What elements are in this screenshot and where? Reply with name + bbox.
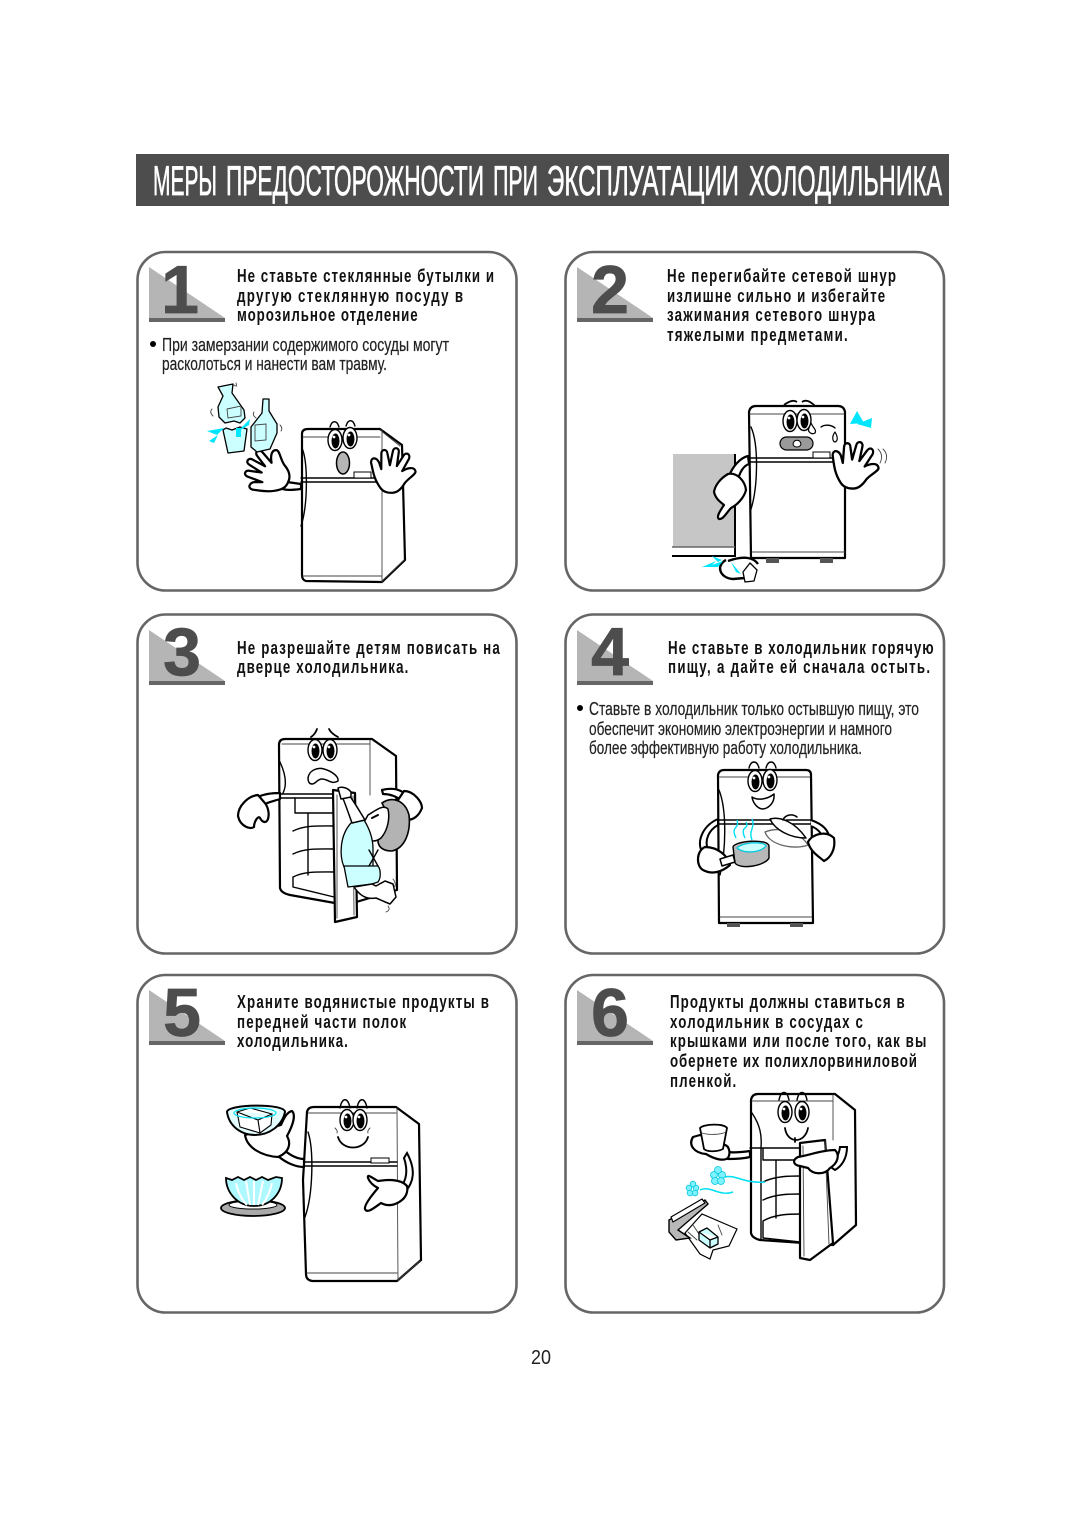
heading 2: тяжелыми предметами.: [667, 325, 848, 346]
heading 6: [670, 992, 926, 1092]
heading 4: пищу, а дайте ей сначала остыть.: [668, 657, 930, 678]
title banner: [136, 154, 949, 206]
heading 1: [237, 266, 494, 326]
note 1: При замерзании содержимого сосуды могут: [162, 334, 449, 355]
number badge 3: 3: [163, 614, 201, 690]
heading 3: Не разрешайте детям повисать на: [237, 638, 501, 659]
heading 1: морозильное отделение: [237, 305, 418, 326]
number badge 4: 4: [591, 614, 629, 690]
title banner: ПРЕДОСТОРОЖНОСТИ: [226, 157, 484, 204]
title banner: МЕРЫ: [153, 157, 217, 204]
heading 6: холодильник в сосудах с: [670, 1012, 863, 1033]
title banner: ЭКСПЛУАТАЦИИ: [547, 157, 739, 204]
note 1: расколоться и нанести вам травму.: [162, 353, 387, 374]
heading 6: крышками или после того, как вы: [670, 1031, 926, 1052]
number badge 1: 1: [161, 252, 199, 328]
panel 6: covered food: [566, 975, 944, 1312]
title banner: ПРИ: [493, 157, 538, 204]
heading 4: Не ставьте в холодильник горячую: [668, 638, 934, 659]
heading 2: излишне сильно и избегайте: [667, 286, 885, 307]
panel 2: power cord: [566, 252, 944, 590]
page number: 20: [531, 1346, 551, 1369]
number badge 2: [577, 252, 653, 328]
note 4: обеспечит экономию электроэнергии и намного: [589, 718, 892, 739]
panel 1: glass bottles: [138, 252, 516, 590]
heading 6: Продукты должны ставиться в: [670, 992, 905, 1013]
heading 3: дверце холодильника.: [237, 657, 408, 678]
number badge 1: [149, 252, 225, 328]
heading 5: Храните водянистые продукты в: [237, 992, 489, 1013]
illustration: surprised fridge with bottles: [207, 383, 418, 582]
heading 1: Не ставьте стеклянные бутылки и: [237, 266, 494, 287]
heading 6: обернете их полихлорвиниловой: [670, 1051, 917, 1072]
heading 5: холодильника.: [237, 1031, 348, 1052]
panel 5: watery foods: [138, 975, 516, 1312]
heading 6: пленкой.: [670, 1071, 736, 1092]
heading 5: [237, 992, 489, 1052]
note 4: более эффективную работу холодильника.: [589, 737, 862, 758]
panel 4: hot food: [566, 614, 944, 954]
heading 2: зажимания сетевого шнура: [667, 305, 876, 326]
heading 4: [668, 638, 934, 678]
illustration: fridge holding hot pot and plate: [698, 762, 834, 927]
number badge 6: [577, 975, 653, 1051]
heading 1: другую стеклянную посуду в: [237, 286, 463, 307]
illustration: worried fridge and pinched cord: [672, 401, 887, 582]
number badge 5: 5: [163, 975, 201, 1051]
illustration: fridge holding bowls of food: [221, 1100, 421, 1281]
number badge 5: [149, 975, 225, 1051]
note 1: [150, 334, 449, 374]
heading 5: передней части полок: [237, 1012, 407, 1033]
number badge 6: 6: [591, 975, 629, 1051]
heading 3: [237, 638, 501, 678]
illustration: fridge with wrapped food and cup: [669, 1092, 856, 1260]
number badge 2: 2: [591, 252, 629, 328]
panel 3: children on door: [138, 614, 516, 954]
number badge 3: [149, 614, 225, 690]
illustration: child hanging on fridge door: [238, 729, 422, 922]
note 4: [577, 698, 919, 758]
note 4: Ставьте в холодильник только остывшую пищу, это: [589, 698, 919, 719]
heading 2: Не перегибайте сетевой шнур: [667, 266, 896, 287]
heading 2: [667, 266, 896, 346]
number badge 4: [577, 614, 653, 690]
